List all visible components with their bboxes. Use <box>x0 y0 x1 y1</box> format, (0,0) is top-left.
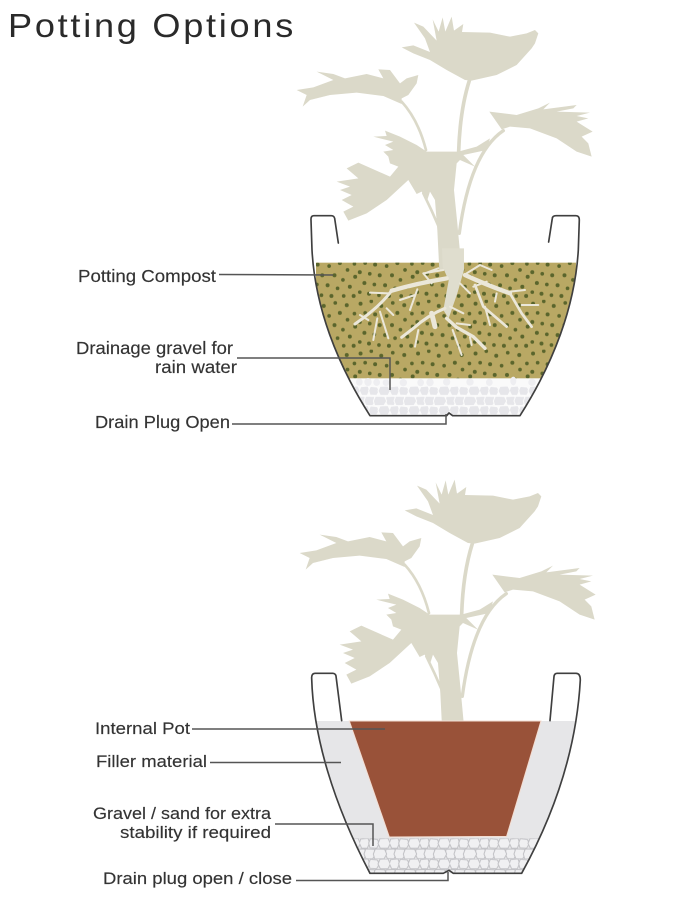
leader: drainage gravel <box>237 358 390 390</box>
leader: drain plug <box>296 872 448 880</box>
roots <box>355 248 538 355</box>
gravel <box>350 838 543 873</box>
label: gravel / sand: stability if required <box>120 823 271 842</box>
leader: drain plug <box>232 414 446 424</box>
label: drainage gravel: rain water <box>155 357 237 377</box>
leader: gravel <box>275 824 373 846</box>
leader: potting compost <box>219 274 333 276</box>
leader: filler material <box>210 762 341 764</box>
pot outline <box>312 673 580 873</box>
label: gravel / sand <box>93 804 272 842</box>
title: Potting Options <box>8 7 296 44</box>
label: filler material: Filler material <box>96 752 207 771</box>
panel: internal pot diagram <box>93 480 596 888</box>
internal pot <box>349 721 541 837</box>
panel: potting compost diagram <box>76 17 593 432</box>
label: drain plug open: Drain Plug Open <box>95 412 230 432</box>
soil with compost dots <box>316 263 576 379</box>
leader: internal pot <box>192 728 385 730</box>
filler material <box>310 721 583 874</box>
label: drainage gravel <box>76 338 237 377</box>
label: gravel / sand: Gravel / sand for extra <box>93 804 272 823</box>
label: internal pot: Internal Pot <box>95 719 190 738</box>
plant <box>297 17 593 270</box>
label: drain plug open / close: Drain plug open / close <box>103 869 292 888</box>
label: drainage gravel: Drainage gravel for <box>76 338 233 358</box>
plant <box>300 480 596 733</box>
drainage gravel <box>350 377 543 416</box>
pot outline <box>311 216 579 416</box>
label: potting compost: Potting Compost <box>78 266 216 286</box>
